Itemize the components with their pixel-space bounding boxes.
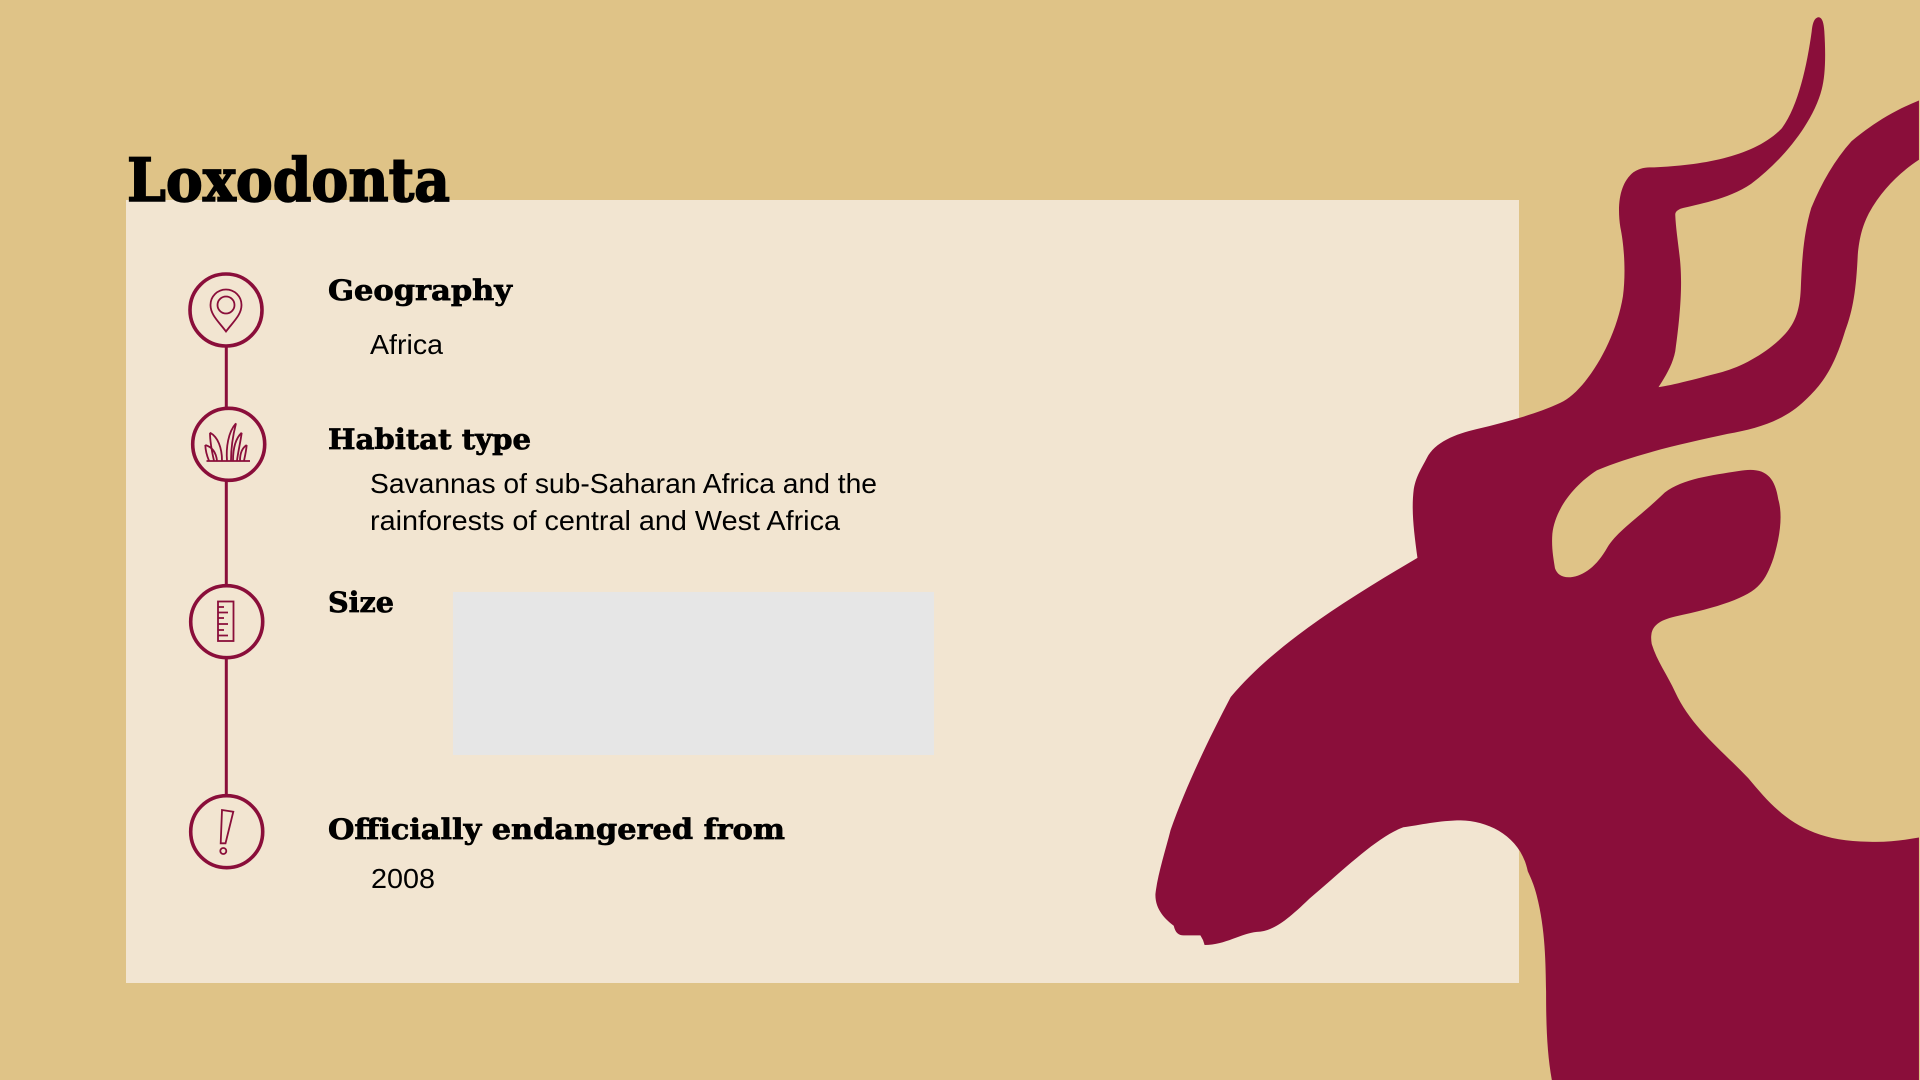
icon: exclamation mark [191,796,263,868]
text: geography value: Africa [370,329,443,360]
heading: geography: Geography [328,274,513,307]
text: habitat description: rainforests of central and West Africa [370,505,840,536]
heading: officially endangered from: Officially endangered from [328,813,785,846]
icon: ruler [191,586,263,658]
text: endangered year: 2008 [371,863,435,894]
icon: map pin [190,274,262,346]
title: Loxodonta [127,146,450,216]
timeline connector [225,345,228,797]
icon: grass [193,408,265,480]
illustration: kudu silhouette [1155,17,1919,1080]
text: habitat description: Savannas of sub-Saharan Africa and the [370,468,877,499]
heading: size: Size [328,586,394,619]
heading: habitat type: Habitat type [328,423,531,456]
panel: information card [126,200,1519,983]
size image placeholder [453,592,934,755]
text: habitat description [370,468,877,536]
